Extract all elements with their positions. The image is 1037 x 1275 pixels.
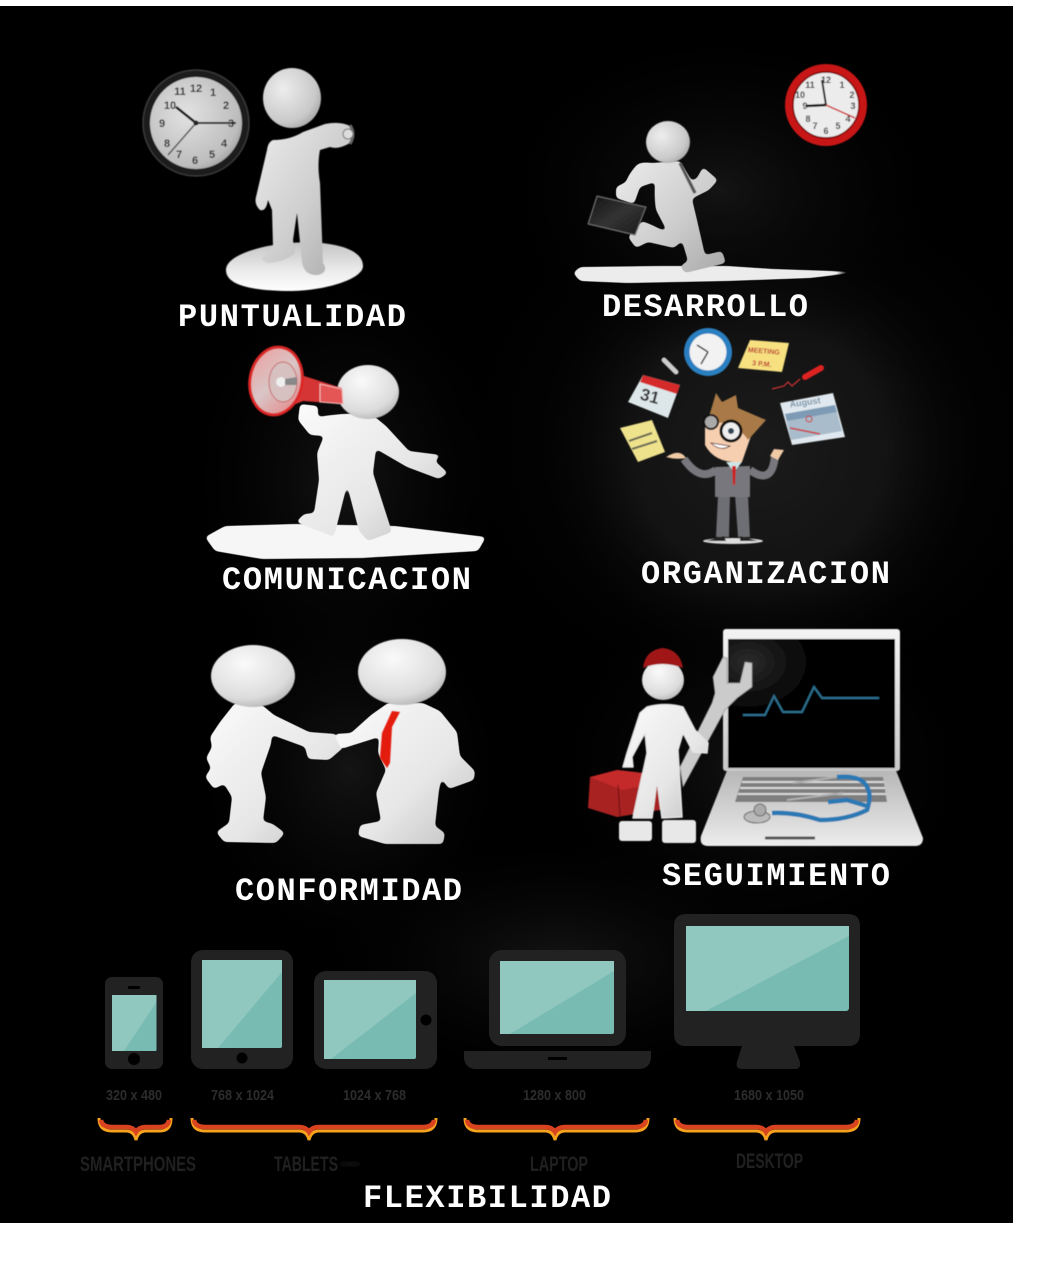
- icon: wall clock black: [143, 70, 249, 176]
- label: comunicacion: COMUNICACION: [222, 562, 471, 599]
- icon: blue clock: [684, 328, 732, 376]
- figure: person checking watch: [226, 68, 363, 291]
- figure: mechanic with laptop and stethoscope: [588, 629, 923, 846]
- resolution labels: 768 x 1024: [211, 1087, 275, 1104]
- icon: wall clock red: 3: [850, 101, 856, 111]
- icon: meeting note: [738, 340, 789, 372]
- label: puntualidad: PUNTUALIDAD: [178, 299, 406, 336]
- resolution labels: [106, 1087, 804, 1104]
- category labels: TABLETS: [274, 1153, 338, 1176]
- icon: calendar 31 May: [628, 375, 680, 418]
- icon: wall clock red: 7: [812, 121, 818, 131]
- icon: wall clock red: 10: [795, 90, 805, 100]
- label: desarrollo: DESARROLLO: [602, 289, 808, 326]
- icon: wall clock black: 1: [210, 87, 216, 99]
- label: seguimiento: SEGUIMIENTO: [662, 858, 890, 895]
- icon: wall clock black: 12: [190, 83, 202, 95]
- category labels: DESKTOP: [736, 1150, 803, 1173]
- icon: wall clock black: 3: [228, 118, 234, 130]
- icon: yellow note: [620, 420, 665, 462]
- icon: red marker: [772, 368, 821, 389]
- icon: wall clock black: 2: [223, 100, 229, 112]
- icon: calendar 31 May: 31: [638, 385, 661, 408]
- icon: wall clock red: 9: [802, 101, 808, 111]
- category labels: [80, 1150, 803, 1176]
- icon: wall clock red: 12: [821, 75, 831, 85]
- megaphone: [244, 343, 343, 419]
- icon: wall clock black: 5: [209, 149, 215, 161]
- label: flexibilidad: FLEXIBILIDAD: [363, 1180, 611, 1217]
- icon: wall clock red: 6: [823, 126, 829, 136]
- icon: meeting note: MEETING: [748, 347, 781, 357]
- icon: wall clock red: 5: [835, 121, 841, 131]
- figure: person running with briefcase: [573, 121, 862, 283]
- icon: august calendar: [780, 393, 845, 445]
- figure: person with megaphone: [205, 343, 486, 559]
- icon: wall clock red: [785, 64, 867, 146]
- icon: wall clock black: 6: [192, 155, 198, 167]
- laptop: [701, 629, 923, 846]
- icon: desktop monitor: [674, 914, 860, 1069]
- left person: [205, 645, 344, 843]
- label: organizacion: ORGANIZACION: [641, 556, 890, 593]
- icon: laptop: [464, 950, 651, 1069]
- icon: wall clock red: 4: [845, 114, 851, 124]
- resolution labels: 1024 x 768: [343, 1087, 406, 1104]
- category labels: SMARTPHONES: [80, 1153, 196, 1176]
- cartoon man: [666, 393, 784, 544]
- label: conformidad: CONFORMIDAD: [235, 873, 462, 910]
- figure: juggling cartoon man with office items: [620, 328, 845, 544]
- icon: tablet portrait: [191, 950, 293, 1069]
- icon: august calendar: August: [789, 395, 821, 409]
- mechanic: [588, 648, 752, 843]
- category labels: LAPTOP: [530, 1153, 588, 1176]
- right person: [334, 639, 475, 844]
- icon: wall clock black: 11: [174, 86, 186, 98]
- icon: wall clock red: 2: [849, 90, 855, 100]
- icon: wall clock black: 8: [164, 138, 170, 150]
- resolution labels: 1280 x 800: [523, 1087, 586, 1104]
- icon: meeting note: 3 P.M.: [752, 360, 772, 369]
- icon: wall clock black: 4: [221, 138, 228, 150]
- icon: wall clock black: 9: [159, 118, 165, 130]
- icon: smartphone: [105, 977, 163, 1069]
- figure: two people shaking hands: [205, 639, 475, 844]
- icon: paperclip: [664, 360, 676, 372]
- resolution labels: 320 x 480: [106, 1087, 162, 1104]
- icon: tablet landscape: [314, 971, 437, 1069]
- stethoscope: [744, 777, 870, 823]
- icon: wall clock red: 11: [805, 80, 815, 90]
- curly braces: [99, 1118, 859, 1140]
- icon: wall clock black: 7: [176, 149, 182, 161]
- resolution labels: 1680 x 1050: [734, 1087, 804, 1104]
- icon: wall clock red: 8: [805, 114, 811, 124]
- icon: wall clock black: 10: [164, 100, 176, 112]
- icon: wall clock red: 1: [839, 80, 845, 90]
